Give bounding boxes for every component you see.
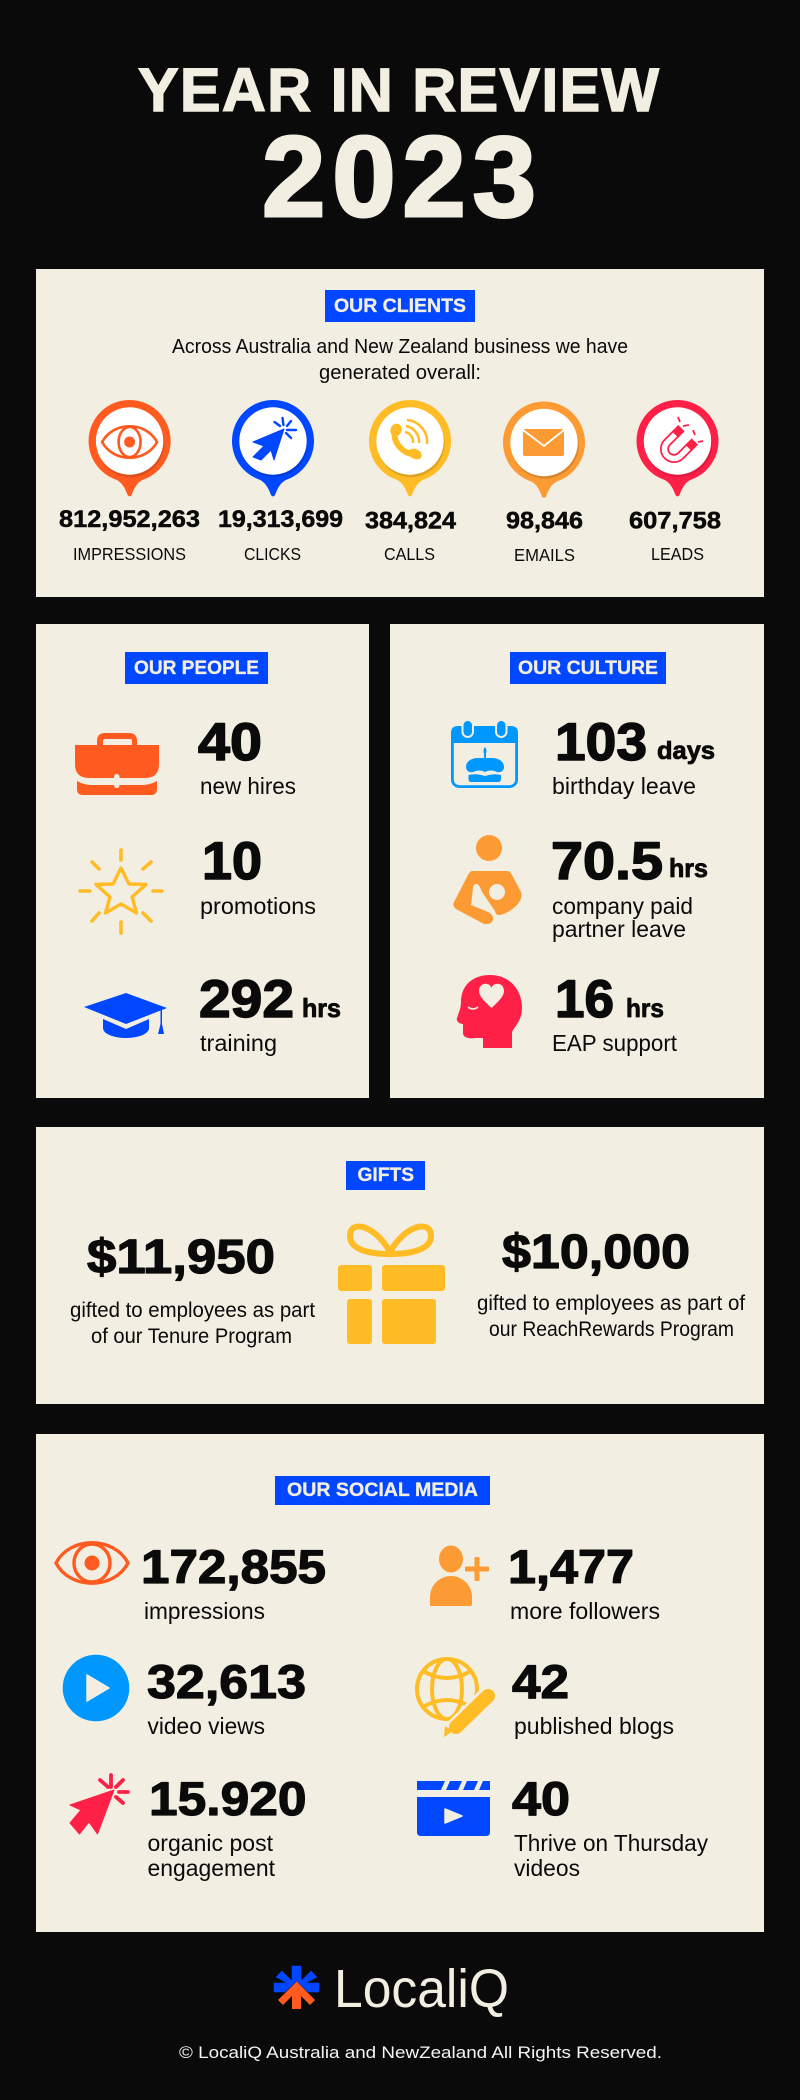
stat: post engagement: engagement xyxy=(148,1855,276,1881)
logo: LocaliQ xyxy=(274,1959,509,2019)
stat: birthday leave: days xyxy=(657,737,715,765)
stat: emails xyxy=(506,508,583,565)
icon: impressions pin xyxy=(89,400,171,496)
icon: graduation cap xyxy=(84,993,167,1038)
panel: our people xyxy=(36,624,369,1098)
heading: our people: OUR PEOPLE xyxy=(134,658,259,679)
stat: leads xyxy=(629,508,721,564)
icon: calls pin xyxy=(369,400,451,496)
stat: EAP support: 16 xyxy=(555,970,614,1029)
icon: gift box xyxy=(338,1226,445,1344)
stat: video views xyxy=(147,1655,306,1739)
icon: briefcase xyxy=(75,733,159,795)
heading: our social media: OUR SOCIAL MEDIA xyxy=(287,1480,478,1501)
intro text xyxy=(172,336,628,384)
icon: birthday calendar xyxy=(451,720,518,787)
stat: new hires xyxy=(198,713,296,799)
stat: post engagement: organic post xyxy=(148,1830,274,1856)
logo wordmark: LocaliQ xyxy=(334,1959,509,2019)
stat: promotions: 10 xyxy=(202,832,262,891)
icon: globe with pencil xyxy=(417,1659,488,1737)
stat: partner leave: partner leave xyxy=(552,916,686,942)
icon: clicks pin xyxy=(232,400,314,496)
stat: clicks: CLICKS xyxy=(244,544,301,564)
stat: emails: 98,846 xyxy=(506,508,583,534)
stat: partner leave: 70.5 xyxy=(551,832,663,891)
stat: published blogs: 42 xyxy=(512,1655,569,1708)
panel: our clients xyxy=(36,269,764,597)
stat: reachrewards program xyxy=(477,1226,745,1341)
heading: our culture: OUR CULTURE xyxy=(518,658,658,679)
stat: video views: video views xyxy=(148,1713,265,1739)
stat: tenure program: of our Tenure Program xyxy=(91,1325,292,1348)
stat: training: 292 xyxy=(199,970,294,1029)
icon: parent and child xyxy=(453,835,522,924)
stat: post engagement xyxy=(148,1772,306,1881)
stat: social impressions xyxy=(141,1540,326,1624)
heading: our clients xyxy=(325,290,475,322)
icon: red click cursor xyxy=(70,1775,128,1834)
stat: impressions: 812,952,263 xyxy=(59,506,200,533)
stat: partner leave: company paid xyxy=(552,893,693,919)
stat: calls: CALLS xyxy=(384,544,435,564)
icon: play button xyxy=(63,1655,129,1721)
stat: video views: 32,613 xyxy=(147,1655,306,1708)
stat: thrive on thursday: Thrive on Thursday xyxy=(514,1830,708,1856)
icon: logo asterisk xyxy=(274,1966,319,2009)
icon: head with heart xyxy=(457,975,522,1048)
stat: partner leave xyxy=(551,832,708,942)
stat: clicks xyxy=(218,506,343,564)
intro text: generated overall: xyxy=(319,362,481,384)
stat: post engagement: 15.920 xyxy=(149,1772,306,1825)
stat: tenure program: gifted to employees as part xyxy=(70,1299,315,1322)
copyright: © LocaliQ Australia and NewZealand All Rights Reserved. xyxy=(179,2043,662,2062)
stat: birthday leave xyxy=(552,713,715,799)
intro text: Across Australia and New Zealand business we have xyxy=(172,336,628,358)
stat: social impressions: 172,855 xyxy=(141,1540,326,1593)
heading: our clients: OUR CLIENTS xyxy=(334,296,466,317)
stat: partner leave: hrs xyxy=(669,853,708,883)
heading: our social media xyxy=(275,1476,490,1505)
stat: reachrewards program: our ReachRewards Program xyxy=(489,1318,734,1341)
stat: birthday leave: birthday leave xyxy=(552,773,696,799)
stat: followers: 1,477 xyxy=(508,1540,634,1593)
stat: social impressions: impressions xyxy=(144,1598,265,1624)
stat: new hires: new hires xyxy=(200,773,296,799)
stat: clicks: 19,313,699 xyxy=(218,506,343,533)
stat: training: training xyxy=(200,1030,277,1056)
stat: promotions: promotions xyxy=(200,893,316,919)
heading: gifts xyxy=(346,1161,425,1190)
title: 2023 xyxy=(262,114,536,241)
stat: tenure program: $11,950 xyxy=(87,1231,275,1284)
stat: impressions xyxy=(59,506,200,564)
stat: thrive on thursday: videos xyxy=(514,1855,580,1881)
stat: EAP support xyxy=(552,970,678,1056)
stat: leads: 607,758 xyxy=(629,508,721,534)
stat: promotions xyxy=(200,832,316,919)
stat: training xyxy=(199,970,341,1056)
stat: calls xyxy=(365,508,457,564)
title xyxy=(138,56,659,241)
stat: emails: EMAILS xyxy=(514,545,575,565)
stat: followers xyxy=(508,1540,660,1624)
stat: calls: 384,824 xyxy=(365,508,457,534)
icon: emails pin xyxy=(503,401,585,498)
stat: birthday leave: 103 xyxy=(555,713,647,772)
stat: published blogs xyxy=(512,1655,674,1739)
stat: thrive on thursday xyxy=(512,1772,708,1881)
panel: gifts xyxy=(36,1127,764,1404)
heading: gifts: GIFTS xyxy=(358,1165,414,1186)
stat: published blogs: published blogs xyxy=(514,1713,674,1739)
stat: EAP support: EAP support xyxy=(552,1030,678,1056)
stat: new hires: 40 xyxy=(198,713,262,772)
stat: thrive on thursday: 40 xyxy=(512,1772,570,1825)
stat: EAP support: hrs xyxy=(626,993,664,1023)
stat: reachrewards program: $10,000 xyxy=(502,1226,690,1279)
stat: tenure program xyxy=(70,1231,315,1348)
icon: eye xyxy=(56,1543,128,1583)
title: YEAR IN REVIEW xyxy=(138,56,659,124)
stat: leads: LEADS xyxy=(651,544,704,564)
icon: star xyxy=(80,850,162,933)
stat: impressions: IMPRESSIONS xyxy=(73,544,186,564)
stat: reachrewards program: gifted to employees as part of xyxy=(477,1292,745,1315)
heading: our people xyxy=(125,652,268,684)
icon: video clapperboard xyxy=(417,1781,490,1836)
stat: training: hrs xyxy=(302,993,341,1023)
stat: followers: more followers xyxy=(510,1598,660,1624)
icon: leads pin xyxy=(636,400,718,496)
heading: our culture xyxy=(510,652,666,684)
panel: our culture xyxy=(390,624,764,1098)
panel: our social media xyxy=(36,1434,764,1932)
icon: add follower xyxy=(430,1546,489,1606)
